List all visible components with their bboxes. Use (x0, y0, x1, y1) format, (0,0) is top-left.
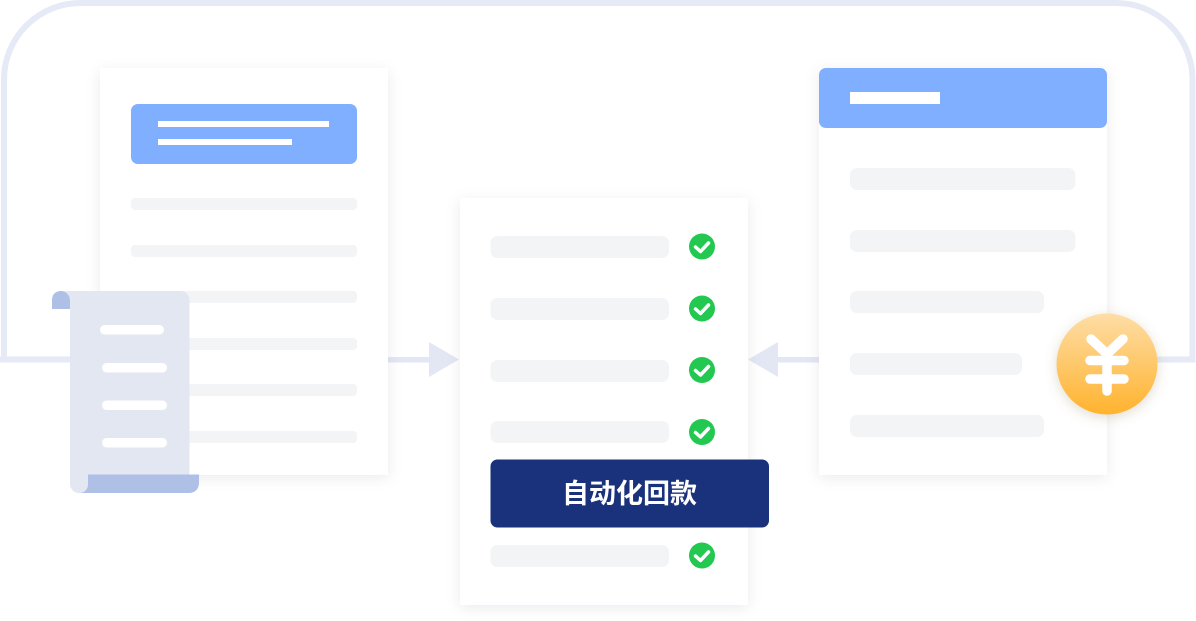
document text lines (850, 168, 1076, 437)
icon: yen coin (1056, 314, 1158, 414)
document text lines (131, 198, 357, 443)
callout: automated collection: 自动化回款 (562, 479, 697, 509)
panel: right document (819, 68, 1107, 475)
panel: left document (100, 68, 388, 475)
right arrow into checklist (748, 342, 822, 377)
left arrow into checklist (385, 342, 459, 377)
panel: center checklist (460, 198, 769, 605)
checklist rows (490, 236, 669, 567)
document header (819, 68, 1107, 128)
callout: automated collection (490, 460, 769, 528)
loop connector frame (0, 3, 1192, 362)
document header (131, 104, 357, 164)
icon: paper scroll (52, 291, 199, 493)
icon: green checks (689, 234, 715, 568)
